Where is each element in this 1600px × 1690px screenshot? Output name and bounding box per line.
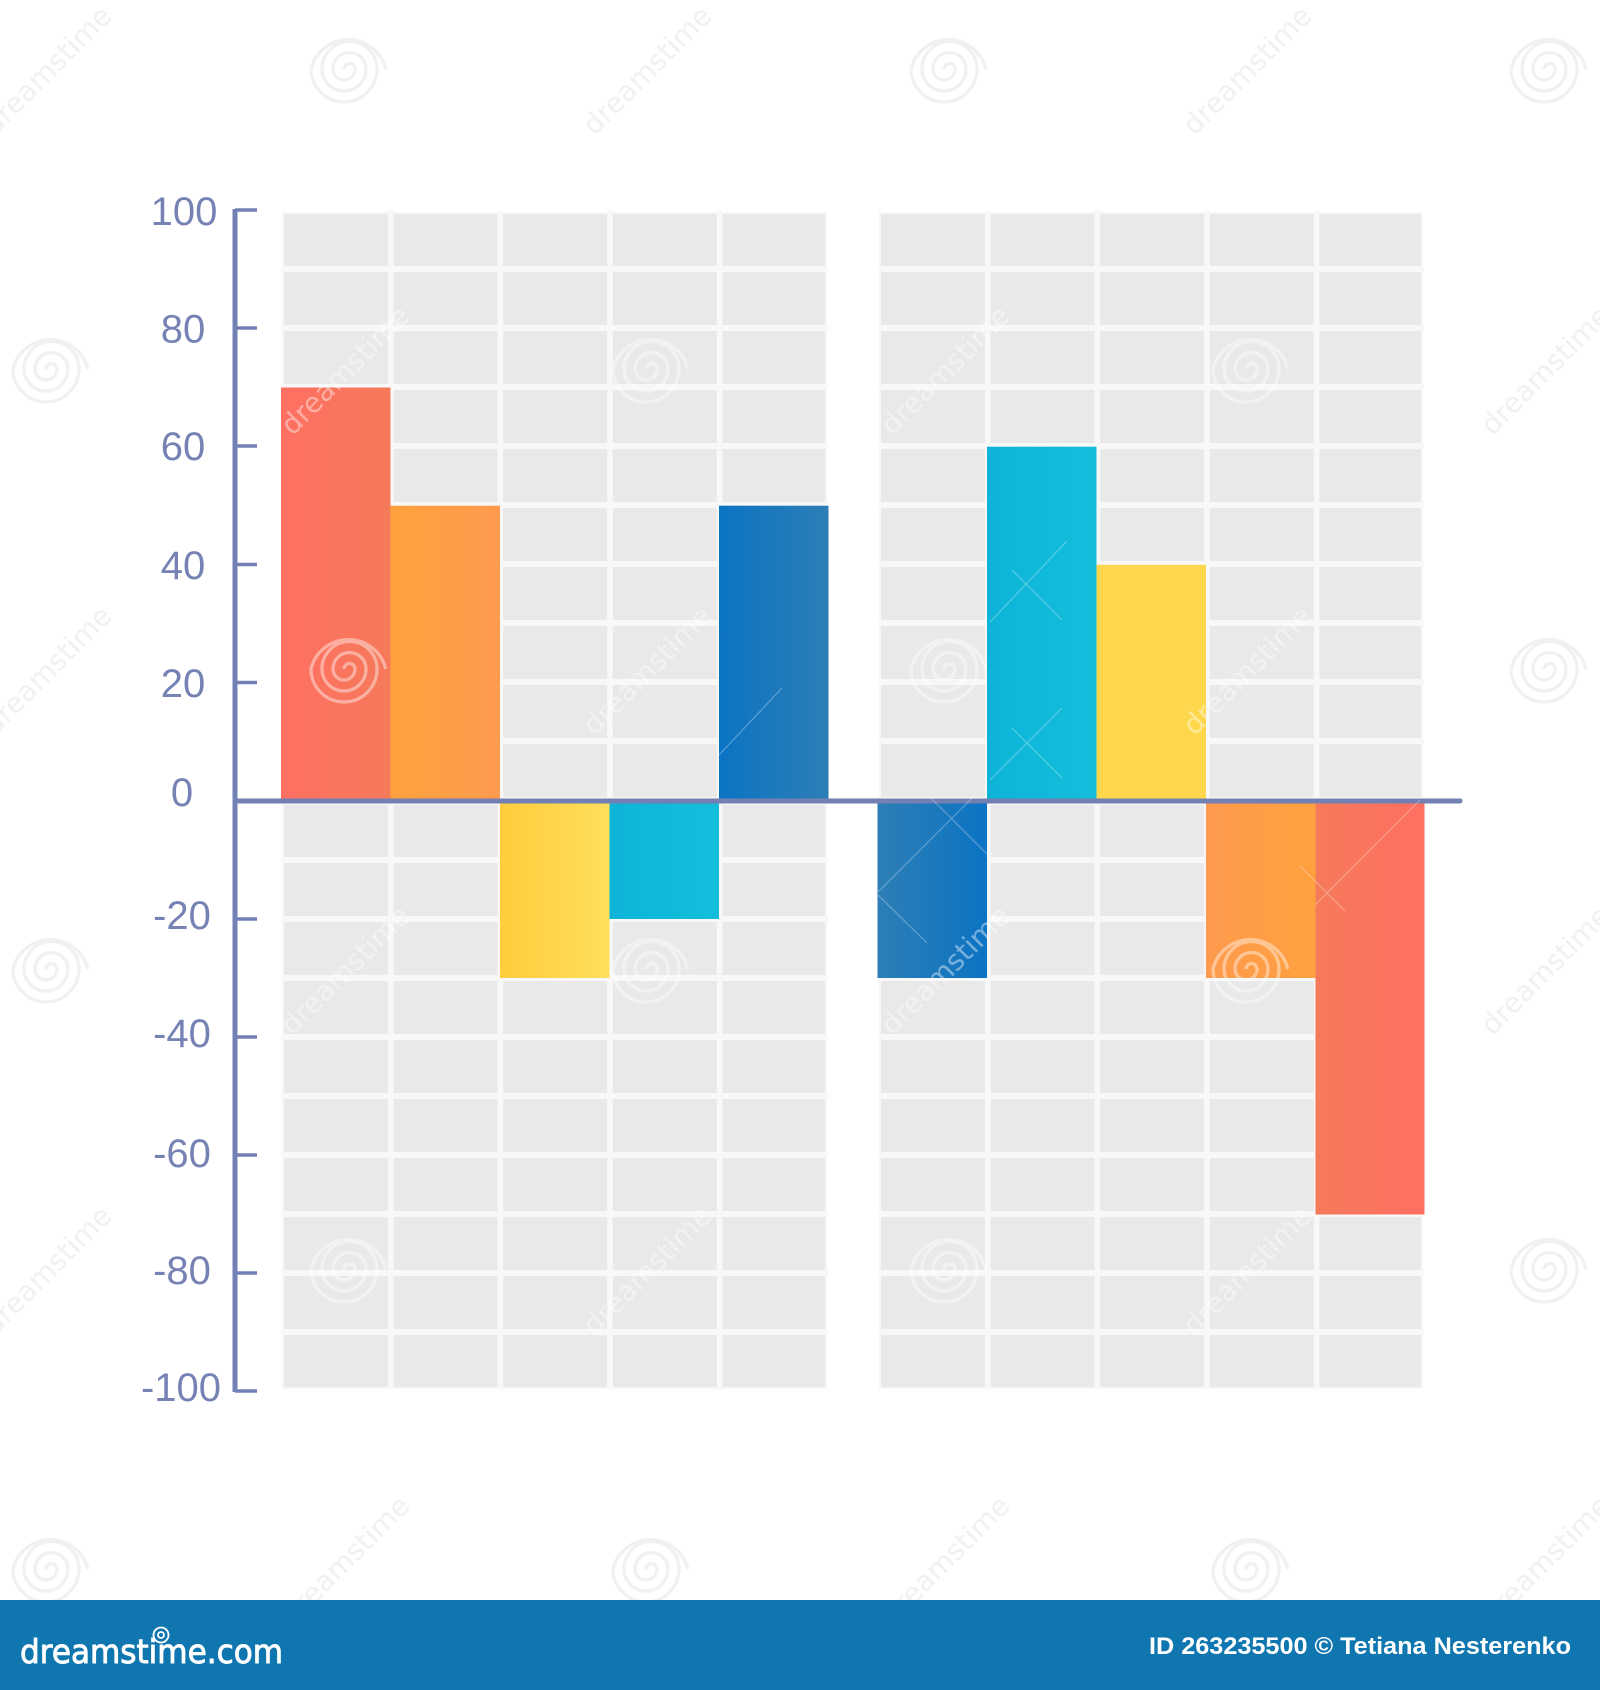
- y axis labels: 20: [161, 662, 205, 706]
- y axis labels: 100: [151, 190, 217, 234]
- watermark overlay on chart: dreamstime: [576, 1199, 718, 1341]
- y axis labels: [141, 190, 221, 1410]
- y axis labels: -40: [153, 1012, 211, 1056]
- bar chart: [281, 388, 1424, 1214]
- y axis labels: -20: [153, 894, 211, 938]
- bar: right group orange -30: [1206, 801, 1316, 978]
- y axis labels: -80: [153, 1249, 211, 1293]
- watermark overlay on chart: [274, 299, 1420, 1341]
- zero baseline: [235, 798, 1460, 804]
- bar: left group blue +50: [719, 506, 828, 801]
- footer logo: dreamstime.com: [20, 1632, 283, 1671]
- watermark overlay on chart: dreamstime: [1176, 1199, 1318, 1341]
- footer bar: [0, 1600, 1600, 1690]
- bar: left group red +70: [281, 388, 390, 801]
- watermark overlay on chart: dreamstime: [274, 299, 416, 441]
- grid panel: right: [878, 210, 1424, 1390]
- grid background: [281, 210, 1424, 1390]
- bar: left group yellow -30: [500, 801, 610, 978]
- watermark overlay on chart: dreamstime: [874, 899, 1016, 1041]
- y axis labels: 60: [161, 425, 205, 469]
- y axis labels: -100: [141, 1366, 221, 1410]
- watermark under chart: dreamstime: [1176, 0, 1318, 141]
- bar: right group yellow +40: [1096, 565, 1206, 801]
- watermark overlay on chart: dreamstime: [874, 299, 1016, 441]
- y axis labels: 80: [161, 308, 205, 352]
- watermark under chart: dreamstime: [274, 1489, 416, 1631]
- bar: left group cyan -20: [610, 801, 719, 919]
- watermark overlay on chart: dreamstime: [576, 599, 718, 741]
- bar: left group orange +50: [390, 506, 500, 801]
- grid panel: left: [281, 210, 828, 1390]
- watermark overlay on chart: dreamstime: [1176, 599, 1318, 741]
- bar: right group cyan +60: [987, 447, 1096, 801]
- y axis labels: -60: [153, 1132, 211, 1176]
- watermark under chart: dreamstime: [874, 1489, 1016, 1631]
- y axis labels: 0: [171, 771, 193, 815]
- bar: right group red -70: [1316, 801, 1424, 1214]
- watermark under chart: dreamstime: [576, 0, 718, 141]
- watermark overlay on chart: dreamstime: [274, 899, 416, 1041]
- footer credit: ID 263235500 © Tetiana Nesterenko: [1149, 1633, 1571, 1660]
- y axis labels: 40: [161, 544, 205, 588]
- y axis: [235, 209, 257, 1392]
- bar: right group blue -30: [878, 801, 987, 978]
